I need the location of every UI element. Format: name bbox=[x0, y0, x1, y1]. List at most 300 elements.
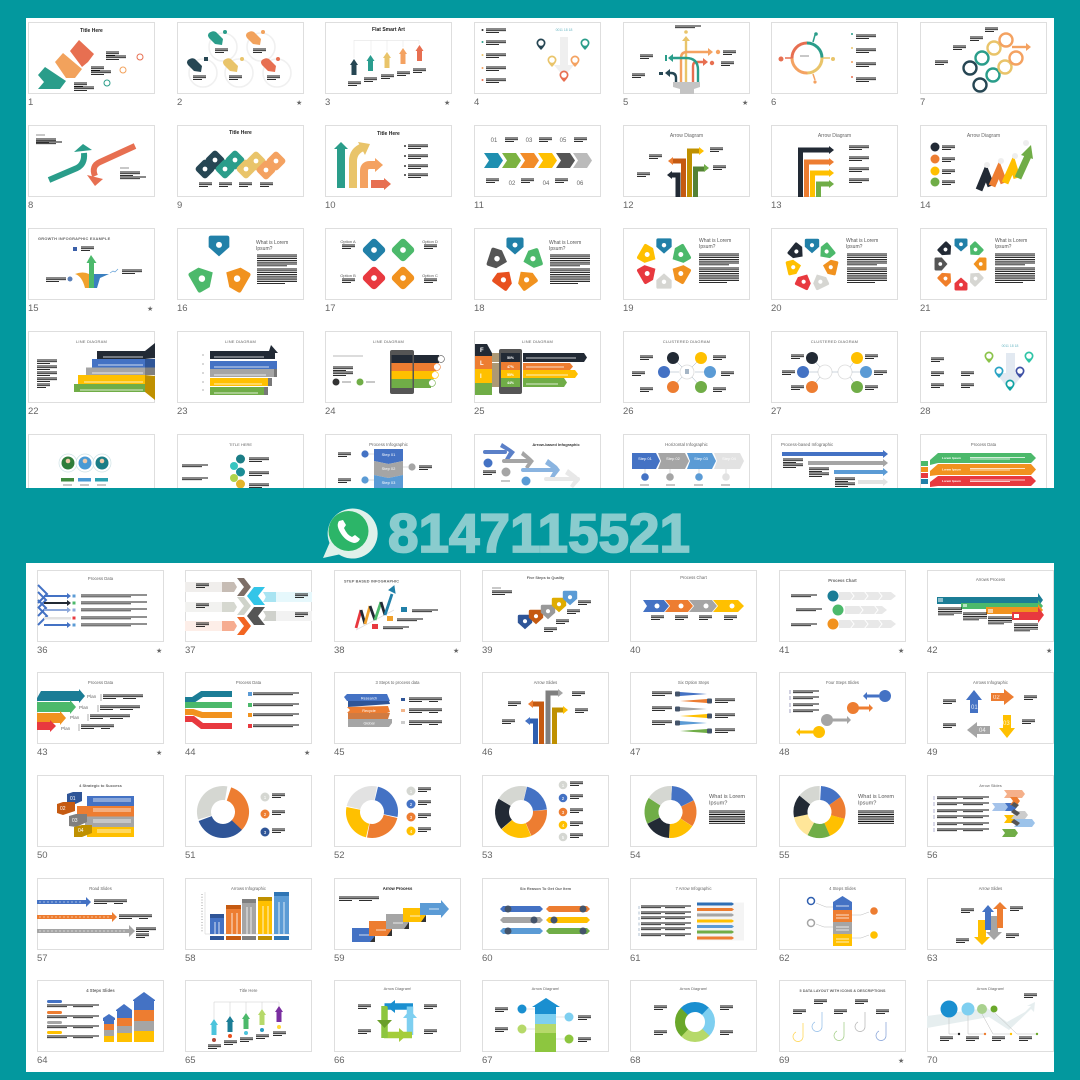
diagram bbox=[185, 692, 299, 728]
slide 41: process chart with light chevrons bbox=[779, 570, 906, 656]
slide 28: pins with down arrow and text: 28 bbox=[920, 406, 931, 417]
slide 68: circular arrows: 68 bbox=[630, 1055, 641, 1066]
slide 5: spreading arrows from hand bbox=[623, 22, 750, 108]
diagram: Step 02 bbox=[382, 466, 396, 471]
diagram bbox=[57, 792, 134, 837]
diagram: 01 bbox=[491, 138, 498, 144]
diagram bbox=[639, 902, 744, 940]
slide 42: arrows process: 42 bbox=[927, 645, 938, 656]
diagram bbox=[793, 1000, 889, 1042]
slide 49: arrows infographic: 49 bbox=[927, 747, 938, 758]
slide 38: step based zigzag: ★ bbox=[453, 647, 459, 655]
diagram bbox=[194, 149, 287, 186]
slide 25: FLIP blocks and phone bbox=[474, 332, 600, 417]
slide 27: double clustered diagram bbox=[771, 332, 898, 417]
slide 7: knot loops bbox=[920, 22, 1046, 108]
title: LINE DIAGRAM bbox=[76, 339, 107, 344]
diagram: Step 01 bbox=[638, 456, 653, 461]
diagram bbox=[338, 449, 432, 488]
diagram bbox=[36, 135, 146, 186]
slide 42: arrows process: ★ bbox=[1046, 647, 1052, 655]
slide 6: ring with four arrows: 6 bbox=[771, 97, 776, 108]
slide 36: process data arrows: ★ bbox=[156, 647, 162, 655]
diagram: Plan bbox=[70, 715, 80, 720]
title: Process Data bbox=[236, 680, 262, 685]
diagram: 0011 18 18 bbox=[1002, 344, 1018, 348]
title: Arrows Process bbox=[976, 577, 1005, 582]
diagram: Lorem Ipsum bbox=[942, 456, 961, 460]
slide 1: diagonal chevron staircase bbox=[28, 22, 154, 108]
title: Ipsum? bbox=[858, 800, 876, 806]
title: TITLE HERE bbox=[229, 442, 252, 447]
diagram: L bbox=[480, 361, 484, 367]
slide 57: road slides bbox=[37, 878, 164, 964]
slide 46: arrow slides: 46 bbox=[482, 747, 493, 758]
title: Six Option Steps bbox=[678, 680, 709, 685]
title: Arrow Diagram! bbox=[680, 986, 707, 991]
diagram bbox=[38, 40, 143, 90]
slide 32: arrow based infographic bbox=[474, 434, 600, 506]
title: What is Lorem bbox=[858, 794, 894, 800]
slide 24: line diagram with phone: 24 bbox=[325, 406, 336, 417]
slide 19: six tags bbox=[623, 228, 750, 314]
diagram bbox=[654, 1001, 733, 1043]
title: 3 Steps to process data bbox=[376, 680, 420, 685]
diagram: 2 bbox=[410, 802, 413, 807]
diagram bbox=[778, 32, 876, 84]
slide 2: five drop circles bbox=[177, 22, 304, 108]
diagram: Plan bbox=[87, 694, 97, 699]
slide 45: 3 steps to process data: 45 bbox=[334, 747, 345, 758]
slide 23: line diagram with stepped bars bbox=[177, 332, 304, 417]
title: 4 Steps Slides bbox=[829, 886, 856, 891]
title: Ipsum? bbox=[549, 246, 566, 252]
slide 47: six option steps: 47 bbox=[630, 747, 641, 758]
slide 12: arrow diagram: 12 bbox=[623, 200, 634, 211]
slide 40: process chart chevrons: 40 bbox=[630, 645, 641, 656]
slide 20: seven tags bbox=[771, 228, 898, 314]
diagram: 55% bbox=[507, 373, 514, 377]
diagram: 01 bbox=[70, 796, 76, 802]
diagram bbox=[956, 902, 1023, 945]
slide 69: 5 data layout with icons and descriptions: 69 bbox=[779, 1055, 790, 1066]
diagram: 1 bbox=[562, 783, 565, 788]
slide 2: five drop circles: 2 bbox=[177, 97, 182, 108]
slide 14: rising zigzag arrow: 14 bbox=[920, 200, 931, 211]
slide 24: line diagram with phone bbox=[325, 332, 452, 417]
title: Arrow-based Infographic bbox=[532, 442, 580, 447]
diagram: 04 bbox=[543, 181, 550, 187]
diagram bbox=[187, 30, 291, 87]
slide 60: six reason to get our item bbox=[482, 878, 608, 964]
slide 7: knot loops: 7 bbox=[920, 97, 925, 108]
title: 4 Steps Slides bbox=[86, 988, 115, 993]
slide 18: five tags bbox=[474, 228, 600, 314]
diagram: Step 02 bbox=[666, 456, 681, 461]
diagram: Plan bbox=[61, 726, 71, 731]
slide 3: flat smart art arrows bbox=[325, 22, 452, 108]
diagram: Step 01 bbox=[382, 452, 396, 457]
slide 19: six tags: 19 bbox=[623, 303, 634, 314]
diagram bbox=[791, 590, 896, 630]
slide 47: six option steps bbox=[630, 672, 756, 758]
diagram bbox=[38, 585, 147, 628]
diagram bbox=[632, 352, 734, 393]
slide 16: three tags and text bbox=[177, 228, 304, 314]
whatsapp icon bbox=[323, 509, 378, 559]
diagram: 01 bbox=[971, 705, 978, 711]
slide 52: four segment donut bbox=[334, 776, 460, 861]
diagram bbox=[492, 588, 591, 631]
title: What is Lorem bbox=[699, 238, 731, 244]
slide 11: six chevrons bbox=[474, 126, 600, 211]
slide 36: process data arrows bbox=[37, 570, 164, 656]
diagram bbox=[943, 689, 1037, 738]
slide 41: process chart with light chevrons: 41 bbox=[779, 645, 790, 656]
slide 6: ring with four arrows bbox=[771, 22, 898, 108]
title: Arrow Slides bbox=[534, 680, 557, 685]
diagram: 04 bbox=[78, 828, 84, 834]
slide 8: two opposing bent arrows: 8 bbox=[28, 200, 33, 211]
diagram bbox=[46, 247, 142, 288]
slide 63: crossing arrows bbox=[927, 878, 1054, 964]
slide 4: location pins around down arrow: 4 bbox=[474, 97, 479, 108]
slide 41: process chart with light chevrons: ★ bbox=[898, 647, 904, 655]
diagram: 02 bbox=[993, 695, 1000, 701]
slide 35: process data ribbons bbox=[920, 434, 1046, 506]
slide 67: house stack diagram: 67 bbox=[482, 1055, 493, 1066]
title: Arrow Diagram! bbox=[977, 986, 1004, 991]
diagram bbox=[934, 790, 1035, 837]
title: LINE DIAGRAM bbox=[373, 339, 404, 344]
title: What is Lorem bbox=[995, 238, 1027, 244]
slide 33: horizontal infographic bbox=[624, 434, 750, 506]
slide 28: pins with down arrow and text bbox=[920, 332, 1046, 417]
slide 42: arrows process bbox=[927, 570, 1054, 656]
slide 64: 4 steps stacked houses: 64 bbox=[37, 1055, 48, 1066]
slide 56: arrow slides converging chevrons bbox=[927, 776, 1054, 861]
slide 64: 4 steps stacked houses bbox=[37, 980, 164, 1066]
diagram bbox=[202, 892, 290, 940]
diagram bbox=[500, 906, 590, 934]
slide 55: seven segment donut with text bbox=[779, 776, 906, 861]
diagram bbox=[196, 785, 285, 839]
title: What is Lorem bbox=[549, 240, 581, 246]
slide 51: three segment donut bbox=[185, 776, 312, 861]
title: Ipsum? bbox=[709, 800, 727, 806]
diagram bbox=[208, 1002, 286, 1048]
diagram bbox=[927, 994, 1038, 1040]
title: Arrow Slides bbox=[979, 886, 1002, 891]
diagram bbox=[334, 142, 428, 190]
title: 7 Arrow Infographic bbox=[675, 886, 712, 891]
diagram: 1 bbox=[264, 795, 267, 800]
diagram bbox=[202, 345, 278, 395]
slide 38: step based zigzag bbox=[334, 570, 460, 656]
slide 53: five segment donut: 53 bbox=[482, 850, 493, 861]
slide 22: line diagram fanned bars: 22 bbox=[28, 406, 39, 417]
slide 14: rising zigzag arrow bbox=[920, 126, 1046, 211]
slide 59: arrow process steps bbox=[334, 878, 460, 964]
diagram: Plan bbox=[79, 705, 89, 710]
title: Process Chart bbox=[680, 575, 708, 580]
slide 38: step based zigzag: 38 bbox=[334, 645, 345, 656]
slide 45: 3 steps to process data bbox=[334, 672, 460, 758]
slide 4: location pins around down arrow bbox=[474, 22, 600, 108]
title: Process Chart bbox=[828, 578, 857, 583]
title: Ipsum? bbox=[846, 244, 863, 250]
slide 67: house stack diagram bbox=[482, 980, 608, 1066]
slide 39: five steps to quality bbox=[482, 570, 608, 656]
title: 4 Strategic to Success bbox=[79, 783, 123, 788]
diagram: 03 bbox=[526, 138, 533, 144]
title: Horizontal Infographic bbox=[665, 442, 709, 447]
panel: lower slide thumbnails 36 to 70 bbox=[26, 563, 1054, 1072]
title: Arrow Diagram bbox=[818, 133, 851, 139]
slide 65: hanging arrows: 65 bbox=[185, 1055, 196, 1066]
title: Six Reason To Get Our Item bbox=[520, 886, 572, 891]
diagram bbox=[632, 453, 744, 485]
slide 61: 7 arrow infographic: 61 bbox=[630, 953, 641, 964]
diagram: 04 bbox=[979, 728, 986, 734]
diagram bbox=[785, 239, 887, 291]
slide 65: hanging arrows bbox=[185, 980, 312, 1066]
diagram bbox=[782, 450, 888, 486]
diagram bbox=[484, 138, 592, 187]
diagram: Option D bbox=[422, 239, 438, 244]
title: Road Slides bbox=[89, 886, 112, 891]
diagram: Recycle bbox=[362, 709, 376, 713]
diagram bbox=[643, 600, 744, 619]
diagram: 5 bbox=[562, 835, 565, 840]
slide 9: rounded diamonds: 9 bbox=[177, 200, 182, 211]
title: Ipsum? bbox=[256, 246, 273, 252]
title: CLUSTERED DIAGRAM bbox=[811, 339, 858, 344]
diagram: 3 bbox=[562, 810, 565, 815]
title: Flat Smart Art bbox=[372, 27, 405, 33]
diagram: 02 bbox=[509, 181, 516, 187]
diagram bbox=[652, 692, 735, 734]
diagram bbox=[340, 237, 438, 291]
slide 69: 5 data layout with icons and descriptions: ★ bbox=[898, 1057, 904, 1065]
title: Title Here bbox=[240, 988, 258, 993]
diagram: 1 bbox=[410, 789, 413, 794]
title: Title Here bbox=[80, 28, 103, 34]
slide 34: process based infographic bbox=[772, 434, 898, 506]
diagram bbox=[349, 786, 431, 836]
diagram: Global bbox=[364, 722, 375, 726]
diagram bbox=[59, 454, 111, 485]
title: Title Here bbox=[377, 131, 400, 137]
slide 62: 4 steps house: 62 bbox=[779, 953, 790, 964]
slide 9: rounded diamonds bbox=[177, 126, 304, 211]
diagram bbox=[339, 897, 449, 942]
slide 48: four steps key arrows bbox=[779, 672, 906, 758]
title: Arrows Infographic bbox=[231, 886, 266, 891]
diagram bbox=[636, 238, 739, 289]
title: Arrow Diagram bbox=[670, 133, 703, 139]
title: Title Here bbox=[229, 130, 252, 136]
diagram: Research bbox=[361, 696, 377, 700]
slide 54: six segment donut with text: 54 bbox=[630, 850, 641, 861]
slide 49: arrows infographic bbox=[927, 672, 1054, 758]
title: STEP BASED INFOGRAPHIC bbox=[344, 580, 399, 584]
diagram bbox=[937, 593, 1044, 631]
slide 31: process infographic bbox=[326, 434, 452, 506]
slide 44: process data ribbons: 44 bbox=[185, 747, 196, 758]
diagram bbox=[921, 453, 1036, 487]
diagram: Option B bbox=[340, 273, 356, 278]
slide 50: 4 strategic to success: 50 bbox=[37, 850, 48, 861]
slide 22: line diagram fanned bars bbox=[28, 332, 155, 417]
slide 70: arrow diagram circles and line: 70 bbox=[927, 1055, 938, 1066]
diagram bbox=[37, 689, 143, 732]
title: LINE DIAGRAM bbox=[225, 339, 256, 344]
slide 43: process data plan arrows: ★ bbox=[156, 749, 162, 757]
title: Arrow Diagram! bbox=[384, 986, 411, 991]
title: Ipsum? bbox=[995, 244, 1012, 250]
slide 13: arrow diagram bbox=[771, 126, 898, 211]
slide 43: process data plan arrows: 43 bbox=[37, 747, 48, 758]
panel: upper slide thumbnails 1 to 35 bbox=[26, 18, 1054, 488]
diagram: I bbox=[480, 374, 482, 380]
slide 52: four segment donut: 52 bbox=[334, 850, 345, 861]
slide 50: 4 strategic to success bbox=[37, 776, 164, 861]
slide 17: four options bbox=[325, 228, 452, 314]
diagram: 4 bbox=[562, 823, 565, 828]
slide 37: interlocking chevrons: 37 bbox=[185, 645, 196, 656]
diagram bbox=[348, 40, 426, 85]
title: Process Data bbox=[971, 442, 997, 447]
diagram bbox=[494, 781, 583, 841]
diagram bbox=[486, 237, 590, 292]
title: Arrow Process bbox=[383, 886, 413, 891]
title: CLUSTERED DIAGRAM bbox=[663, 339, 710, 344]
diagram bbox=[637, 147, 726, 197]
slide 44: process data ribbons: ★ bbox=[304, 749, 310, 757]
phone number: 8147115521 bbox=[388, 502, 690, 564]
slide 37: interlocking chevrons bbox=[185, 570, 312, 656]
slide 29: people circles bbox=[28, 434, 154, 506]
diagram: 47% bbox=[507, 365, 514, 369]
title: Arrow Diagram! bbox=[532, 986, 559, 991]
slide 27: double clustered diagram: 27 bbox=[771, 406, 782, 417]
slide 48: four steps key arrows: 48 bbox=[779, 747, 790, 758]
diagram bbox=[483, 443, 580, 488]
diagram: F bbox=[480, 348, 484, 354]
title: Five Steps to Quality bbox=[527, 576, 565, 580]
slide 25: FLIP blocks and phone: 25 bbox=[474, 406, 485, 417]
diagram: 06 bbox=[577, 181, 584, 187]
title: 5 DATA LAYOUT WITH ICONS & DESCRIPTIONS bbox=[800, 989, 886, 993]
slide 58: arrows infographic bars: 58 bbox=[185, 953, 196, 964]
slide 36: process data arrows: 36 bbox=[37, 645, 48, 656]
slide 40: process chart chevrons bbox=[630, 570, 756, 656]
title: What is Lorem bbox=[256, 240, 288, 246]
diagram bbox=[495, 998, 591, 1052]
diagram: 0011 18 18 bbox=[556, 28, 572, 32]
diagram: 2 bbox=[562, 796, 565, 801]
slide 57: road slides: 57 bbox=[37, 953, 48, 964]
slide 23: line diagram with stepped bars: 23 bbox=[177, 406, 188, 417]
diagram: 02 bbox=[60, 806, 66, 812]
diagram bbox=[800, 146, 869, 197]
slide 21: eight tags: 21 bbox=[920, 303, 931, 314]
diagram bbox=[502, 689, 588, 744]
diagram bbox=[790, 690, 891, 738]
slide 11: six chevrons: 11 bbox=[474, 200, 484, 211]
diagram bbox=[782, 352, 887, 393]
title: GROWTH INFOGRAPHIC EXAMPLE bbox=[38, 236, 111, 241]
diagram bbox=[37, 897, 156, 937]
diagram: 4 bbox=[410, 829, 413, 834]
slide 46: arrow slides bbox=[482, 672, 608, 758]
slide 17: four options: 17 bbox=[325, 303, 336, 314]
title: Arrows Infographic bbox=[973, 680, 1008, 685]
diagram: Lorem Ipsum bbox=[942, 468, 961, 472]
diagram bbox=[632, 26, 736, 94]
title: Process Data bbox=[88, 576, 114, 581]
slide 59: arrow process steps: 59 bbox=[334, 953, 345, 964]
diagram: 03 bbox=[72, 818, 78, 824]
slide 20: seven tags: 20 bbox=[771, 303, 782, 314]
diagram bbox=[644, 786, 745, 838]
slide 66: square cycle arrows bbox=[334, 980, 460, 1066]
slide 1: diagonal chevron staircase: 1 bbox=[28, 97, 33, 108]
diagram: 3 bbox=[410, 815, 413, 820]
slide 53: five segment donut bbox=[482, 776, 608, 861]
slide 43: process data plan arrows bbox=[37, 672, 164, 758]
diagram bbox=[47, 992, 155, 1042]
slide 2: five drop circles: ★ bbox=[296, 99, 302, 107]
diagram: Lorem Ipsum bbox=[942, 479, 961, 483]
title: What is Lorem bbox=[846, 238, 878, 244]
slide 26: clustered diagram: 26 bbox=[623, 406, 634, 417]
slide 68: circular arrows bbox=[630, 980, 756, 1066]
diagram: 03 bbox=[1003, 721, 1010, 727]
title: Process Infographic bbox=[369, 442, 409, 447]
diagram bbox=[356, 586, 438, 630]
slide 54: six segment donut with text bbox=[630, 776, 756, 861]
slide 15: growth infographic example: 15 bbox=[28, 303, 39, 314]
diagram bbox=[185, 578, 312, 635]
title: LINE DIAGRAM bbox=[522, 339, 553, 344]
title: Four Steps Slides bbox=[826, 680, 859, 685]
slide 61: 7 arrow infographic bbox=[630, 878, 756, 964]
title: Process-based Infographic bbox=[781, 442, 834, 447]
slide 21: eight tags bbox=[920, 228, 1046, 314]
slide 15: growth infographic example: ★ bbox=[147, 305, 153, 313]
slide 44: process data ribbons bbox=[185, 672, 312, 758]
title: Arrow Slides bbox=[979, 783, 1002, 788]
slide 8: two opposing bent arrows bbox=[28, 126, 154, 211]
slide 15: growth infographic example bbox=[28, 228, 154, 314]
slide 10: bent arrows and list: 10 bbox=[325, 200, 336, 211]
diagram: 2 bbox=[264, 812, 267, 817]
diagram: Step 04 bbox=[722, 456, 737, 461]
slide 10: bent arrows and list bbox=[325, 126, 452, 211]
diagram bbox=[930, 140, 1033, 190]
slide 69: 5 data layout with icons and descriptions bbox=[779, 980, 906, 1066]
diagram: Option C bbox=[422, 273, 438, 278]
slide 30: title here circles bbox=[178, 434, 304, 506]
diagram: 05 bbox=[560, 138, 567, 144]
slide 18: five tags: 18 bbox=[474, 303, 485, 314]
diagram bbox=[358, 1000, 437, 1042]
diagram bbox=[182, 454, 269, 488]
slide 63: crossing arrows: 63 bbox=[927, 953, 938, 964]
slide 3: flat smart art arrows: 3 bbox=[325, 97, 330, 108]
